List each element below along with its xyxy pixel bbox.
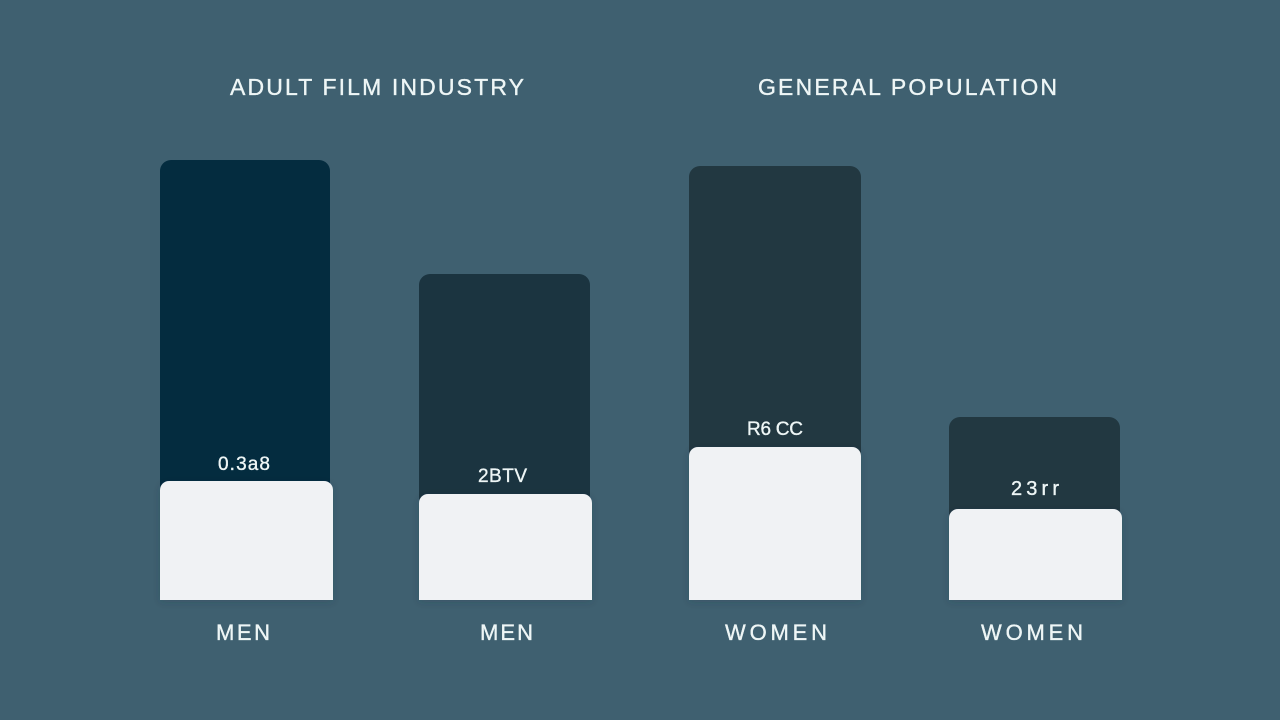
white bar 4 [949, 509, 1122, 600]
value label 4: 23rr [1011, 478, 1059, 500]
white bar 1 [160, 481, 333, 600]
value label 1: 0.3a8 [218, 454, 270, 475]
white bar 2 [419, 494, 592, 600]
category label 2: MEN [480, 620, 533, 645]
bar group: women, second [949, 417, 1122, 645]
value label 2: 2BTV [478, 466, 527, 487]
category label 1: MEN [216, 620, 270, 645]
dark bar 3 [689, 166, 861, 466]
white bar 3 [689, 447, 861, 600]
bar group: men, adult film industry [160, 160, 333, 645]
dark bar 4 [949, 417, 1120, 527]
category label 3: WOMEN [725, 620, 827, 645]
dark bar 1 [160, 160, 330, 500]
value label 3: R6 CC [747, 419, 803, 440]
heading: adult film industry: ADULT FILM INDUSTRY [230, 74, 524, 100]
bar group: men, second [419, 274, 592, 645]
dark bar 2 [419, 274, 590, 509]
heading: general population: GENERAL POPULATION [758, 74, 1057, 100]
bar group: women, general population [689, 166, 861, 645]
category label 4: WOMEN [981, 620, 1083, 645]
